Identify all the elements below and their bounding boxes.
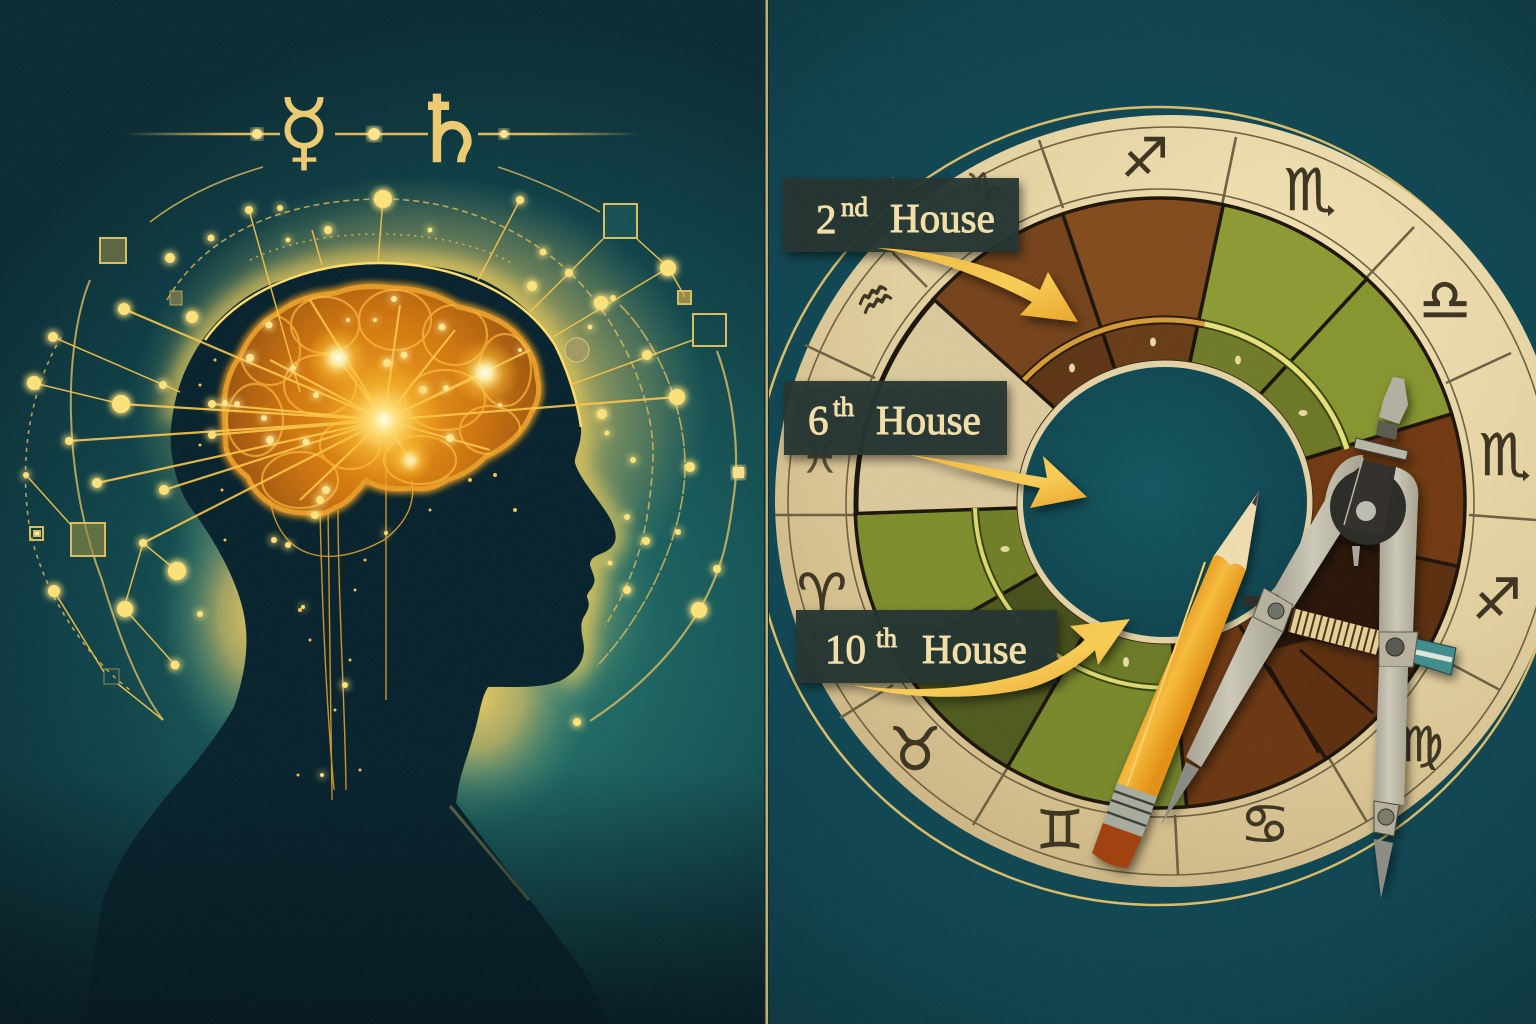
label: 10th House: th: [876, 623, 898, 653]
label: 6th House: [784, 381, 1007, 455]
brain: [224, 287, 539, 514]
brain nodes: [222, 296, 522, 494]
icon: Saturn symbol: ♄︎: [409, 76, 491, 184]
zodiac glyphs: ♐︎: [1472, 568, 1522, 632]
divider: [764, 0, 770, 1024]
shoulder glint: [450, 806, 529, 900]
planet line: [125, 128, 640, 140]
head rim light: [205, 263, 581, 427]
outer gold ring: [753, 107, 1536, 905]
compass right leg: [1374, 467, 1418, 898]
compass hinge: [1330, 458, 1406, 566]
label: 6th House: th: [833, 392, 855, 422]
label: 2nd House: 2: [816, 196, 836, 242]
compass left leg: [1161, 455, 1363, 825]
glowing nodes: [23, 190, 721, 777]
zodiac glyphs: ♊︎: [1036, 798, 1084, 862]
zodiac glyphs: ♑︎: [965, 164, 1005, 216]
zodiac glyphs: ♐︎: [1121, 126, 1169, 190]
pencil: [1092, 491, 1259, 868]
geometric squares: [30, 204, 744, 684]
compass handle: [1354, 377, 1408, 460]
zodiac glyphs: ♈︎: [797, 562, 847, 628]
bottom vignette: [0, 770, 764, 1024]
panel: chart wheel: [753, 0, 1536, 1024]
zodiac glyphs: ♎︎: [1419, 266, 1471, 334]
label: 6th House: House: [876, 397, 981, 443]
zodiac band: [775, 115, 1536, 887]
brain hot spots: [306, 326, 519, 482]
label: 2nd House: nd: [841, 192, 868, 222]
arrow: 6th House: [910, 455, 1087, 508]
scattered sparks: [198, 358, 517, 776]
zodiac glyphs: ♓︎: [800, 432, 840, 484]
spinal cord lines: [270, 430, 413, 800]
lower brown inset: [1269, 650, 1373, 753]
dark gap between compass legs: [1270, 535, 1385, 655]
neural rays: [26, 199, 693, 720]
zodiac glyphs: ♍︎: [1400, 717, 1444, 773]
arrow: 10th House: [853, 619, 1130, 697]
label: 6th House: 6: [808, 397, 828, 443]
degree scale ring: [975, 320, 1347, 688]
arrow: 2nd House: [877, 248, 1078, 322]
drafting compass: [1161, 377, 1456, 898]
label: 2nd House: [783, 178, 1019, 252]
grey moon node: [565, 338, 589, 362]
zodiac glyphs: ♋︎: [1240, 792, 1290, 858]
label: 10th House: 10: [825, 626, 866, 672]
icon: Mercury symbol: ☿︎: [277, 80, 331, 182]
halo behind head: [130, 175, 710, 830]
label: 10th House: House: [922, 626, 1027, 672]
zodiac glyphs: [797, 126, 1531, 862]
orbit arcs: [25, 167, 736, 721]
zodiac glyphs: ♒︎: [845, 268, 905, 332]
compass spring screw: [1243, 601, 1456, 675]
zodiac glyphs: ♏︎: [1284, 156, 1336, 224]
centre hole: [1017, 360, 1313, 644]
zodiac glyphs: ♏︎: [1479, 421, 1531, 489]
label: 10th House: [796, 610, 1057, 683]
house segments: [855, 198, 1465, 808]
head silhouette: [85, 263, 616, 1024]
zodiac glyphs: ♉︎: [888, 715, 942, 785]
label: 2nd House: House: [890, 195, 995, 241]
panel: mind: [0, 0, 764, 1024]
